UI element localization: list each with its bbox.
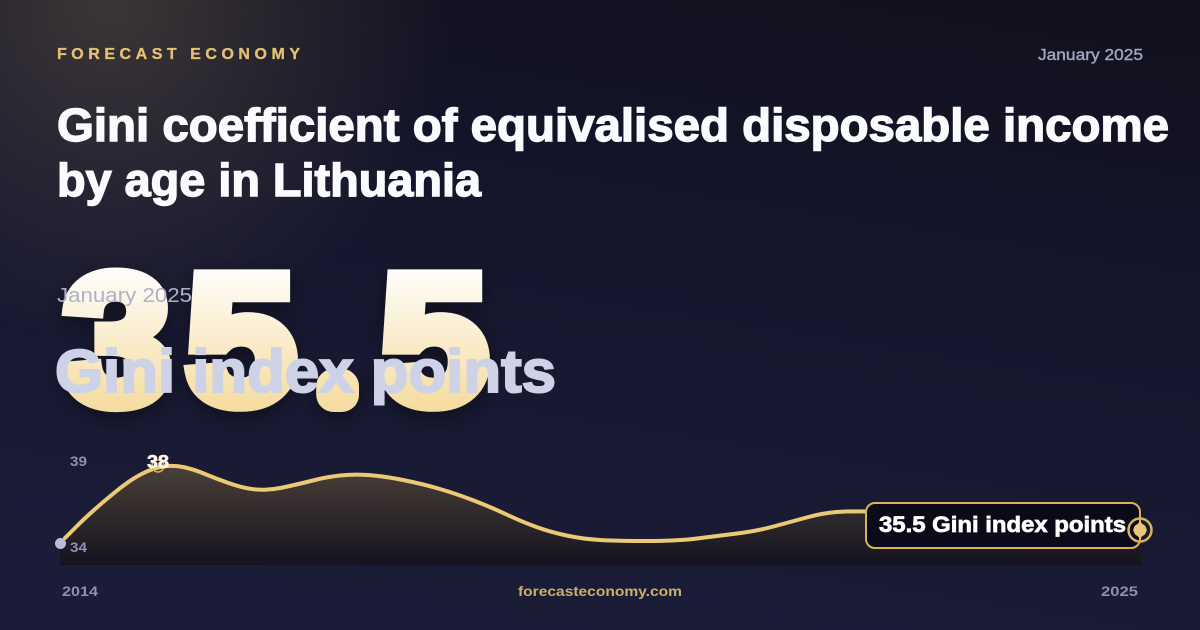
unit label: Gini index points [55,338,556,405]
big number [63,236,488,442]
callout [866,503,1140,548]
brand label: FORECAST ECONOMY [57,46,300,63]
axis label: 34: 34 [70,539,87,555]
axis label: 39: 39 [70,453,87,469]
end marker [1128,518,1152,542]
big number: 5 [186,236,296,442]
date overlay: January 2025 [57,285,192,307]
date top right: January 2025 [1038,47,1143,64]
chart line [65,466,868,541]
big number: 3 [63,236,171,442]
peak marker [152,460,164,472]
callout: 35.5 Gini index points [879,512,1126,537]
title: by age in Lithuania [57,154,481,206]
start year: 2014 [62,583,98,599]
big number: 5 [380,236,488,442]
title: Gini coefficient of equivalised disposable income [57,99,1169,151]
peak value: 38 [147,452,169,472]
title [57,99,1169,206]
chart area [60,466,1141,565]
end year: 2025 [1101,583,1138,599]
source url: forecasteconomy.com [518,583,682,599]
line chart [55,452,1152,565]
big number: . [330,344,345,406]
start point [55,538,66,549]
